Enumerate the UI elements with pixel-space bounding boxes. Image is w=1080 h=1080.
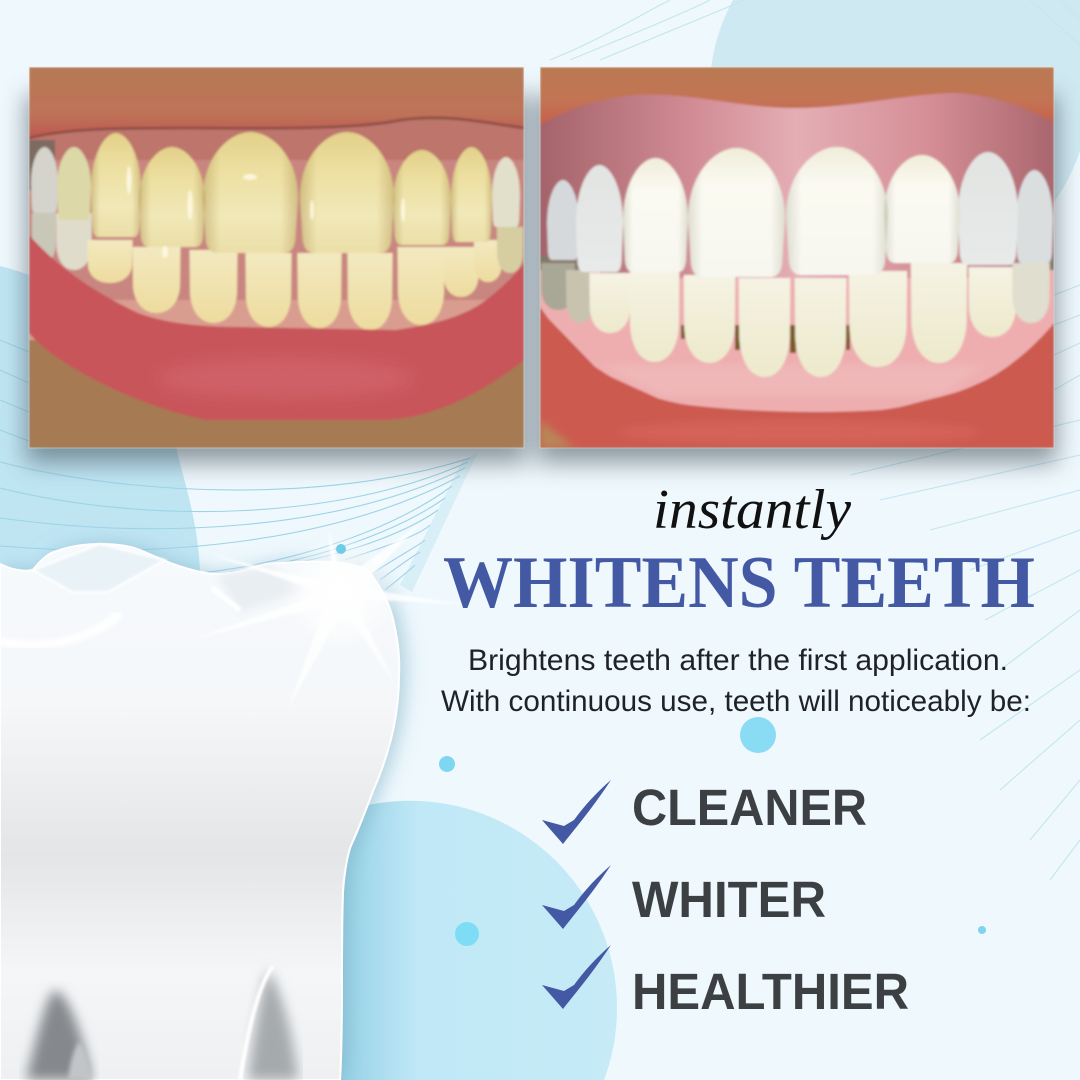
decorative dots [336,544,986,946]
icon: check [542,865,611,929]
benefit: healthier: HEALTHIER [632,963,909,1020]
upper gums [540,90,1054,280]
icon: check [542,780,611,844]
upper teeth [547,147,1053,277]
before photo border [29,67,524,448]
after photo: white teeth [540,67,1054,448]
lower teeth [541,263,1050,377]
lower teeth [32,213,523,330]
after photo border [540,67,1054,448]
photo shadows [26,95,1057,463]
benefit: healthier [542,945,909,1020]
benefit: cleaner: CLEANER [632,779,867,836]
gums [29,159,524,301]
background curved lines [0,340,478,592]
big white tooth with sparkle [0,522,468,1080]
upper lip [29,67,524,138]
benefit: cleaner [542,779,867,844]
description text: Brightens teeth after the first application. [468,644,1008,677]
lower lip [540,307,1054,414]
sparkle [190,522,468,708]
description text [441,644,1031,718]
lower gums [540,270,1054,412]
upper teeth [31,132,520,253]
benefit: whiter: WHITER [632,871,826,928]
tooth crown highlights [33,544,165,592]
before photo: yellow teeth [29,67,524,448]
heading: whitens teeth: WHITENS TEETH [443,542,1035,624]
benefit: whiter [542,865,826,929]
tooth root gaps [26,990,92,1080]
icon: check [542,945,611,1009]
description text: With continuous use, teeth will noticeably be: [441,685,1031,718]
upper lip [540,67,1054,125]
lower lip [29,235,524,420]
tooth glints [126,166,405,258]
dark gaps [681,325,850,353]
heading: instantly: instantly [653,479,851,541]
